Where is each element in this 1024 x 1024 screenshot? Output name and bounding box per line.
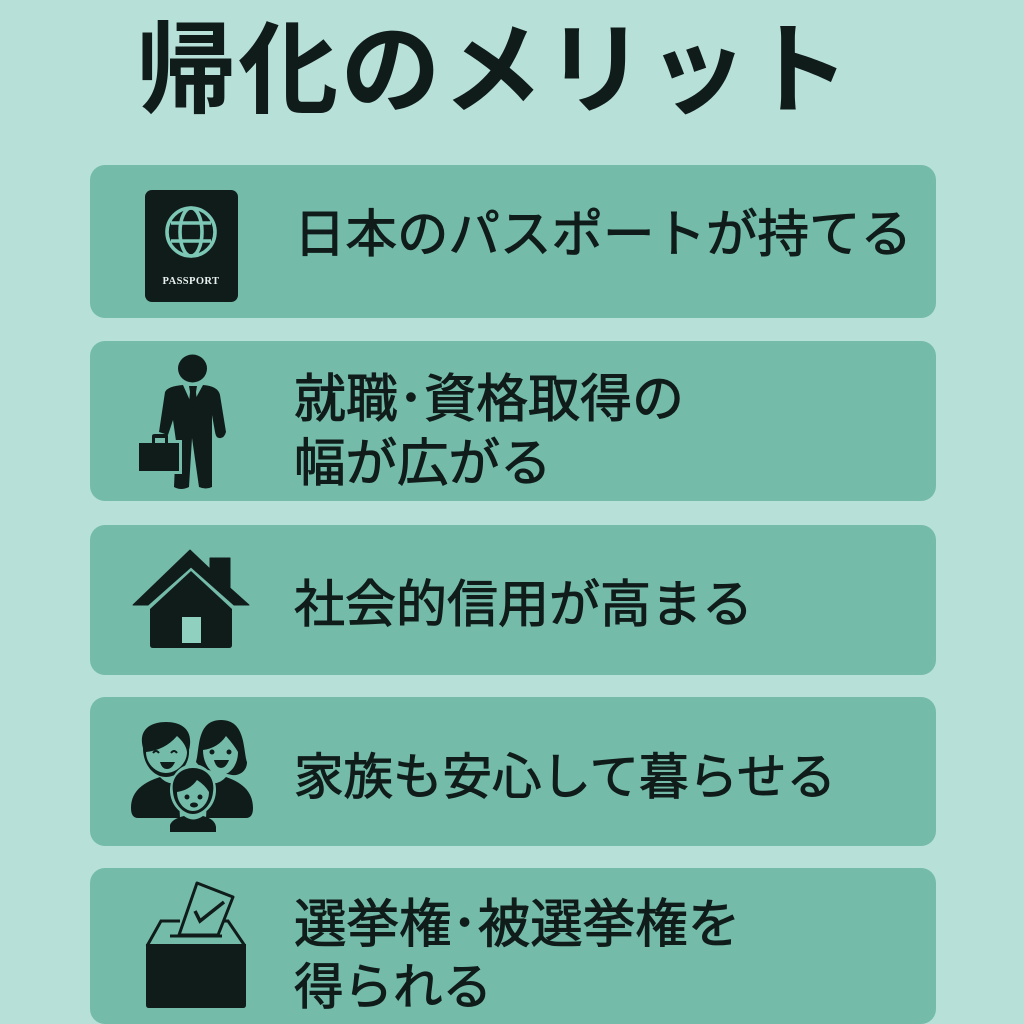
icon: passport xyxy=(145,190,238,302)
icon: passport: PASSPORT xyxy=(163,276,219,287)
man xyxy=(142,722,190,778)
panel: passport xyxy=(90,165,936,318)
text xyxy=(294,371,684,492)
title: 帰化のメリット xyxy=(136,15,852,127)
parents bodies xyxy=(131,777,180,818)
icon: house xyxy=(132,550,250,648)
text: 日本のパスポートが持てる xyxy=(294,205,912,263)
child xyxy=(170,764,216,816)
icon: family xyxy=(131,720,253,832)
text: 家族も安心して暮らせる xyxy=(294,750,836,805)
text: 幅が広がる xyxy=(294,434,552,492)
woman xyxy=(196,720,247,775)
faces xyxy=(160,760,229,769)
text xyxy=(294,895,740,1015)
icon: ballot box xyxy=(146,882,246,1008)
panel: credit xyxy=(90,525,936,675)
panel: family xyxy=(90,697,936,846)
text: 社会的信用が高まる xyxy=(294,576,753,633)
panel: voting rights xyxy=(90,868,936,1024)
text: 就職･資格取得の xyxy=(294,371,684,429)
text: 得られる xyxy=(294,960,492,1015)
panel: career xyxy=(90,341,936,501)
text: 選挙権･被選挙権を xyxy=(294,895,740,954)
icon: businessman with briefcase xyxy=(139,354,226,489)
